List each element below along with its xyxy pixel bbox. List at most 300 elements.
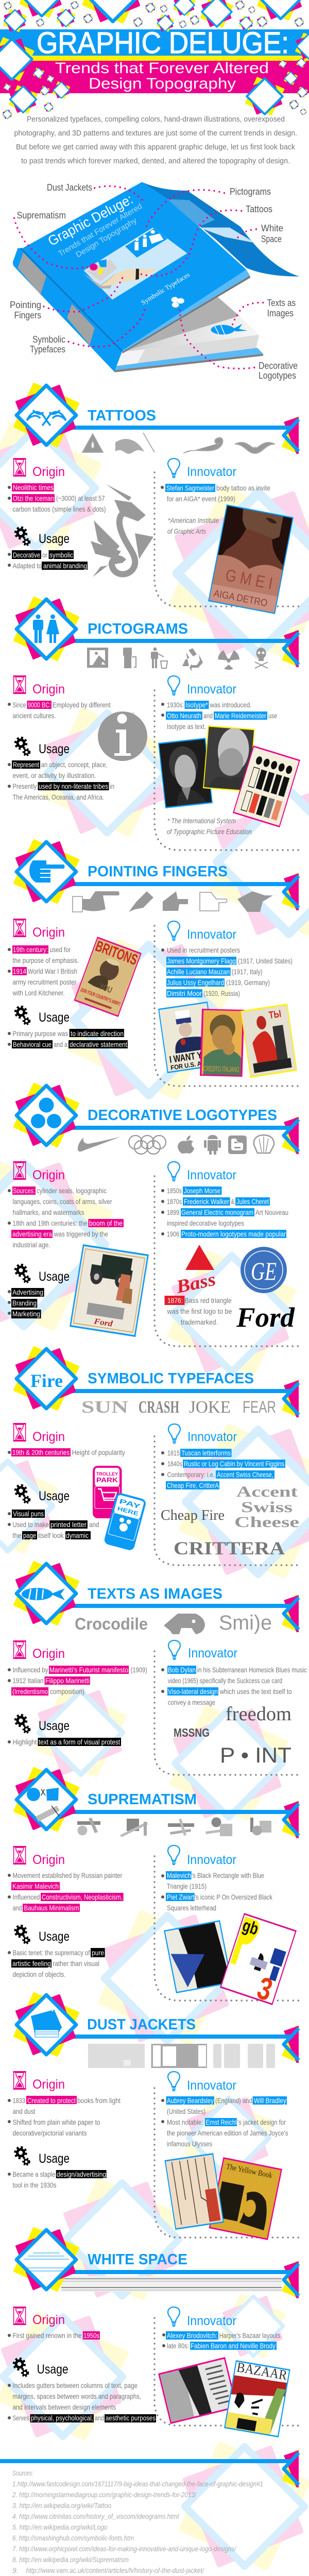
sources list: 1.http://www.fastcodesign.com/1671117/9-big-ideas-that-changed-the-face-of-graphic-design#1 xyxy=(12,2480,263,2488)
origin bullets: Influenced xyxy=(12,1893,40,1901)
subtitle line 2: Design Topography xyxy=(89,75,236,92)
icon: light bulb xyxy=(168,1162,180,1181)
logo: General Electric xyxy=(241,1247,287,1293)
innovator text: Harper's Bazaar layouts xyxy=(219,2331,281,2340)
heading: TATTOOS xyxy=(88,408,156,424)
origin bullets xyxy=(8,945,79,997)
usage bullets: Adapted to xyxy=(12,562,42,570)
cover subtitle 1: Trends that Forever Altered xyxy=(57,202,144,258)
origin bullets xyxy=(8,1448,125,1456)
innovator text: Viso-lateral design xyxy=(168,1687,218,1696)
illustration: trolley park sign: PARK xyxy=(96,1476,118,1484)
footer bar with arrow xyxy=(0,2450,299,2487)
innovator text: (1920, Russia) xyxy=(203,989,240,997)
sources list: Sources: xyxy=(12,2469,33,2477)
origin bullets: hallmarks, and watermarks xyxy=(12,1208,84,1216)
heading: SYMBOLIC TYPEFACES xyxy=(88,1370,254,1387)
label: White xyxy=(261,223,283,233)
label xyxy=(267,297,296,318)
poster: Britons: YOU xyxy=(97,982,113,995)
origin bullets: 1912 Italian xyxy=(12,1676,43,1685)
section: decorative logotypes xyxy=(8,1084,300,1346)
usage bullets xyxy=(8,2170,107,2189)
artwork: Piet Zwart: 3 xyxy=(253,1970,277,2008)
usage bullets: declarative statement xyxy=(70,1040,127,1048)
origin bullets: (1909) xyxy=(131,1666,147,1674)
usage bullets: text as a form of visual protest xyxy=(39,1738,120,1746)
innovator text: (1919, Germany) xyxy=(226,978,270,987)
sample: smile: Smi)e xyxy=(219,1612,272,1634)
usage bullets xyxy=(8,1510,99,1539)
heading: origin: Origin xyxy=(32,1647,65,1661)
origin bullets xyxy=(8,483,106,513)
innovator text: 's iconic P On Oversized Black xyxy=(195,1893,273,1901)
innovator text xyxy=(161,1666,307,1706)
illustration: pay here sign: HERE xyxy=(116,1505,139,1517)
icon: light bulb xyxy=(168,2072,180,2091)
heading: usage: Usage xyxy=(39,1719,70,1733)
section: pointing fingers xyxy=(8,840,300,1086)
poster: Russian: ТЫ xyxy=(268,1008,282,1021)
origin bullets: Movement established by Russian painter xyxy=(12,1871,123,1879)
sample: POINT: P • INT xyxy=(220,1743,291,1767)
icon: hourglass xyxy=(13,919,26,937)
icon: man and woman xyxy=(33,614,59,643)
innovator text: Joseph Morse xyxy=(184,1187,220,1195)
ad: Ford xyxy=(70,1244,149,1337)
cover subtitle 2: Design Topography xyxy=(74,216,139,259)
innovator text: Proto-modern logotypes made popular xyxy=(181,1230,286,1238)
label xyxy=(10,299,41,320)
label: Symbolic xyxy=(32,334,65,345)
intro paragraph: Personalized typefaces, compelling colors, hand-drawn illustrations, overexposed xyxy=(27,115,285,124)
icon: fish xyxy=(22,1588,65,1600)
origin bullets: advertising era xyxy=(12,1230,52,1238)
innovator text: convey a message xyxy=(168,1698,215,1706)
sample: crocodile: Crocodile xyxy=(75,1615,148,1633)
section: suprematism xyxy=(8,1768,300,2010)
poster: Credito Italiano: CREDITO ITALIANO xyxy=(203,1064,239,1074)
innovator text: Julius Ussy Engelhard xyxy=(167,978,224,987)
poster: Credito Italiano xyxy=(200,1009,244,1077)
sample: Accent Swiss Cheese xyxy=(234,1483,299,1531)
magazine cover: Bazaar xyxy=(224,2359,290,2437)
innovator text xyxy=(161,701,277,731)
icon row: jacket spreads xyxy=(88,2044,275,2068)
innovator text: Bob Dylan xyxy=(168,1666,196,1674)
heading: innovator: Innovator xyxy=(187,1853,236,1867)
innovator text: 1870s xyxy=(167,1197,182,1206)
artwork: Malevich xyxy=(164,1920,232,1993)
label: Tattoos xyxy=(246,204,272,214)
innovator text: Piet Zwart xyxy=(167,1893,194,1901)
gray stripes xyxy=(61,2276,282,2292)
usage bullets: Marketing xyxy=(12,1310,40,1318)
book cover: The Yellow Book xyxy=(209,2157,282,2240)
illustration: trolley park sign xyxy=(93,1466,122,1518)
innovator text: Dimitri Moor xyxy=(167,989,202,997)
icon: book xyxy=(31,2009,62,2038)
usage bullets: dynamic xyxy=(66,1531,89,1539)
photo: body tattoo: AIGA DETRO xyxy=(213,588,268,609)
label: Space xyxy=(261,233,282,244)
poster: Uncle Sam: FOR U.S. ARMY xyxy=(170,1058,215,1072)
usage bullets: design/advertising xyxy=(57,2170,106,2178)
heading: WHITE SPACE xyxy=(88,2251,187,2268)
origin bullets: Height of popularity xyxy=(72,1448,125,1456)
origin bullets: 9000 BC: xyxy=(28,701,51,709)
sample: Cheap Fire: Cheap Fire xyxy=(161,1507,225,1523)
usage bullets: Basic tenet: the supremacy of xyxy=(12,1948,90,1957)
innovator text xyxy=(161,1187,288,1238)
innovator text: for an AIGA* event (1999) xyxy=(167,495,235,503)
heading: origin: Origin xyxy=(32,1430,65,1444)
innovator text xyxy=(161,1871,273,1912)
usage bullets: the xyxy=(12,1531,21,1539)
magazine cover: Bazaar: BAZAAR xyxy=(235,2360,289,2383)
usage bullets: Serves xyxy=(12,2414,29,2422)
sample: FEAR: FEAR xyxy=(243,1398,276,1416)
section: texts as images xyxy=(8,1562,307,1775)
icon: light bulb xyxy=(168,2307,180,2326)
origin bullets: was triggered by the xyxy=(54,1230,108,1238)
innovator text: which uses the text itself to xyxy=(219,1687,292,1696)
heading: usage: Usage xyxy=(39,742,70,756)
origin bullets: Neolithic times xyxy=(13,483,54,492)
innovator text: use xyxy=(268,711,277,720)
magazine spread xyxy=(158,2357,237,2424)
origin bullets: composition) xyxy=(50,1687,84,1696)
icon: suprematist shapes xyxy=(27,1788,60,1822)
intro paragraph: But before we get carried away with this apparent graphic deluge, let us first look back xyxy=(16,143,295,151)
innovator text: Accent Swiss Cheese, xyxy=(217,1470,273,1479)
cover author: Symbolic Typefaces xyxy=(140,270,191,307)
label: Pointing xyxy=(10,299,41,310)
sources list: 3. http://en.wikipedia.org/wiki/Tattoo xyxy=(12,2501,111,2510)
innovator text: General Electric monogram xyxy=(181,1208,253,1216)
label xyxy=(259,360,298,381)
sources list xyxy=(12,2469,263,2576)
innovator text: James Montgomery Flagg xyxy=(167,957,236,965)
section: pictograms xyxy=(8,598,300,850)
icon: white space lines xyxy=(24,2253,69,2271)
heading: usage: Usage xyxy=(37,2362,68,2377)
innovator text: Cheap Fire, CritterA xyxy=(167,1481,219,1489)
icon: light bulb xyxy=(168,459,180,478)
innovator text: Squares letterhead xyxy=(167,1904,216,1912)
origin bullets: carbon tattoos (simple lines & dots) xyxy=(12,505,106,513)
icon: three circles xyxy=(31,1097,61,1128)
origin bullets: 1914 xyxy=(13,967,26,975)
usage bullets: Includes gutters between columns of text, page xyxy=(12,2381,138,2389)
usage bullets: symbolic xyxy=(49,551,73,559)
innovator text: Ernst Reichl xyxy=(206,2118,237,2126)
usage bullets: depiction of objects. xyxy=(12,1970,66,1978)
icon: hourglass xyxy=(13,1640,26,1659)
innovator text: 1815 xyxy=(167,1449,180,1457)
origin bullets: with Lord Kitchener. xyxy=(12,989,65,997)
intro paragraph: photography, and 3D patterns and textures are just some of the current trends in design. xyxy=(14,129,297,138)
icon: hourglass xyxy=(13,2071,26,2090)
artwork: Piet Zwart xyxy=(218,1913,297,2010)
photo: body tattoo: G M E I xyxy=(224,566,274,593)
sample: Crittera: CRITTERA xyxy=(174,1538,285,1558)
usage bullets: in xyxy=(110,782,114,790)
innovator text xyxy=(162,2331,281,2350)
heading: origin: Origin xyxy=(32,465,65,479)
origin bullets: and dust xyxy=(12,2107,36,2115)
origin bullets: 1950s xyxy=(83,2331,99,2340)
usage bullets: and xyxy=(89,1520,99,1529)
usage bullets: Became a staple xyxy=(12,2170,55,2178)
innovator text: and xyxy=(203,711,213,720)
origin bullets: World War I British xyxy=(28,967,77,975)
origin bullets: decorative/pictorial variants xyxy=(12,2129,87,2137)
label xyxy=(261,223,283,244)
icon: fire lettering: Fire xyxy=(30,1370,63,1391)
usage bullets: and xyxy=(95,2414,104,2422)
heading: origin: Origin xyxy=(32,2077,65,2092)
heading: innovator: Innovator xyxy=(187,1430,237,1444)
innovator text: (1917, Italy) xyxy=(232,968,263,976)
innovator text xyxy=(161,1449,285,1489)
origin bullets: First gained renown in the xyxy=(12,2331,82,2340)
section: white space xyxy=(8,2228,300,2437)
innovator text: Frederick Walker xyxy=(184,1197,229,1206)
heading: DUST JACKETS xyxy=(87,2016,196,2033)
heading: SUPREMATISM xyxy=(88,1791,197,1808)
innovator text: Stefan Sagmeister xyxy=(166,484,214,492)
heading: origin: Origin xyxy=(32,1168,65,1182)
heading: POINTING FINGERS xyxy=(88,863,228,880)
footnote: *American Institute xyxy=(168,516,219,524)
heading: PICTOGRAMS xyxy=(88,621,188,637)
usage bullets: or xyxy=(42,551,47,559)
icon: dragon tattoo xyxy=(91,484,153,577)
icon: gears xyxy=(15,1485,30,1503)
cover title: Graphic Deluge: xyxy=(45,191,135,249)
icon: gears xyxy=(15,1715,30,1733)
footnote: * The International System xyxy=(167,817,236,825)
icon: gears xyxy=(15,528,30,545)
origin bullets: languages, coins, coats of arms, silver xyxy=(12,1197,112,1206)
innovator text: Otto Neurath xyxy=(167,711,201,720)
innovator text: 's jacket design for xyxy=(237,2118,286,2126)
innovator text: late 80s: xyxy=(167,2342,189,2350)
innovator text: Isotype* xyxy=(185,701,208,709)
usage bullets xyxy=(8,550,88,570)
logo: Bass: Bass xyxy=(174,1269,217,1297)
usage bullets xyxy=(8,1948,105,1978)
origin bullets: Employed by different xyxy=(53,701,111,709)
intro paragraph xyxy=(14,115,297,165)
innovator text: Art Nouveau xyxy=(255,1208,288,1216)
heading: usage: Usage xyxy=(39,2151,70,2166)
footnote xyxy=(167,817,252,836)
heading: origin: Origin xyxy=(32,682,65,697)
origin bullets: and xyxy=(12,1904,22,1912)
origin bullets: Created to protect xyxy=(27,2096,76,2105)
photo: Otto Neurath xyxy=(203,725,255,792)
sample: CRASH: CRASH xyxy=(139,1398,179,1417)
icon: hourglass xyxy=(13,675,26,694)
innovator text: Triangle (1915) xyxy=(167,1882,207,1890)
illustration: pay here sign xyxy=(104,1492,147,1551)
usage bullets: printed letter xyxy=(50,1520,87,1529)
usage bullets: used by non-literate tribes xyxy=(39,782,108,790)
origin bullets xyxy=(8,1187,124,1249)
note: Bass: Bass red triangle xyxy=(185,1296,232,1304)
innovator text: 1850s xyxy=(167,1187,182,1195)
innovator text: was introduced. xyxy=(210,701,251,709)
subtitle line 1: Trends that Forever Altered xyxy=(55,60,269,77)
innovator text: Used in recruitment posters xyxy=(167,946,240,954)
icon: hourglass xyxy=(13,1846,26,1865)
icon row: suprematist compositions xyxy=(77,1818,271,1837)
usage bullets: rather than visual xyxy=(53,1959,99,1968)
innovator text: Tuscan letterforms xyxy=(181,1449,231,1457)
usage bullets: page xyxy=(23,1531,36,1539)
heading: usage: Usage xyxy=(39,1010,70,1025)
innovator text: inspired decorative logotypes xyxy=(167,1219,244,1227)
icon: hourglass xyxy=(13,1423,26,1442)
icon: tribal tattoo xyxy=(27,410,66,426)
logo: Ford: Ford xyxy=(236,1302,295,1333)
sample: JOKE: JOKE xyxy=(189,1398,231,1417)
origin bullets xyxy=(8,2096,121,2137)
origin bullets: books from light xyxy=(77,2096,121,2105)
usage bullets: animal branding xyxy=(43,562,87,570)
usage bullets: Advertising xyxy=(12,1288,43,1296)
sources list: 2. http://morningstarmediagroup.com/graphic-design-trends-for-2013/ xyxy=(12,2490,197,2499)
label: Images xyxy=(267,308,294,318)
poster: Britons: JOIN YOUR COUNTRY'S ARMY! xyxy=(79,987,122,1007)
icon: gears xyxy=(15,1926,29,1943)
poster: Uncle Sam xyxy=(158,1002,217,1073)
icon row: logos xyxy=(78,1135,274,1155)
label: Pictograms xyxy=(230,186,271,197)
sample: MSSNG: MSSNG xyxy=(174,1726,210,1739)
usage bullets: to indicate direction xyxy=(71,1029,124,1038)
origin bullets: the purpose of emphasis. xyxy=(12,956,79,964)
innovator text: Isotype as text. xyxy=(167,722,206,731)
logo: Bass xyxy=(174,1245,217,1297)
innovator text: 1840s xyxy=(167,1460,182,1468)
label: Texts as xyxy=(267,297,296,308)
origin bullets: 19th & 20th centuries xyxy=(12,1448,70,1456)
note: Bass: trademarked. xyxy=(181,1318,218,1326)
innovator text: Achille Luciano Mauzan xyxy=(167,968,230,976)
section: symbolic typefaces xyxy=(8,1347,300,1565)
sources list: 7. http://www.orphicpixel.com/ideas-for-making-innovative-and-unique-logo-designs/ xyxy=(12,2545,237,2553)
section: tattoos xyxy=(8,384,300,614)
heading: usage: Usage xyxy=(39,532,70,546)
heading: origin: Origin xyxy=(32,925,65,940)
origin bullets: 19th century: xyxy=(13,945,48,954)
origin bullets: Influenced by xyxy=(12,1666,48,1674)
icon: hourglass xyxy=(13,2307,26,2325)
icon: hourglass xyxy=(13,1161,26,1180)
heading: innovator: Innovator xyxy=(187,2314,236,2328)
sample: Accent Swiss Cheese: Accent xyxy=(236,1483,298,1500)
heading: usage: Usage xyxy=(39,1929,70,1944)
icon: gears xyxy=(15,1265,30,1282)
usage bullets: The Americas, Oceania, and Africa. xyxy=(12,793,104,801)
icon row: pictograms xyxy=(87,647,268,671)
innovator text: (1917, United States) xyxy=(238,957,293,965)
sample: SUN: SUN xyxy=(81,1398,129,1417)
icon row: pointing hands xyxy=(73,891,273,912)
innovator text: Aubrey Beardsley xyxy=(167,2096,214,2105)
heading: innovator: Innovator xyxy=(187,682,236,697)
innovator text: infamous Ulysses xyxy=(167,2140,212,2148)
usage bullets: Primary purpose was xyxy=(12,1029,68,1038)
usage bullets: Highlight xyxy=(12,1738,37,1746)
book cover: Ulysses xyxy=(165,2153,224,2230)
usage bullets: event, or activity by illustration. xyxy=(12,771,96,779)
origin bullets: Since xyxy=(12,701,26,709)
innovator text: Alexey Brodovitch: xyxy=(167,2331,217,2340)
innovator text: Will Bradley xyxy=(254,2096,286,2105)
footnote xyxy=(167,516,219,535)
usage bullets: Presently xyxy=(12,782,37,790)
icon: light bulb xyxy=(168,1424,180,1443)
heading: innovator: Innovator xyxy=(187,1168,236,1182)
heading: TEXTS AS IMAGES xyxy=(88,1586,222,1602)
sources list: 6. http://smashinghub.com/symbolic-fonts.htm xyxy=(12,2534,134,2542)
usage bullets: Represent xyxy=(13,760,39,769)
usage bullets: physical, psychological, xyxy=(31,2414,93,2422)
innovator text: (England) and xyxy=(215,2096,252,2105)
illustration: trolley park sign: TROLLEY xyxy=(96,1471,118,1477)
usage bullets: Used to make xyxy=(12,1520,49,1529)
icon: info circle xyxy=(98,711,147,761)
usage bullets xyxy=(8,1288,44,1318)
label: Typefaces xyxy=(30,344,65,354)
innovator text: & xyxy=(231,1197,235,1206)
usage bullets: itself look xyxy=(38,1531,64,1539)
usage bullets xyxy=(8,2381,156,2422)
origin bullets: army recruitment poster xyxy=(12,978,77,986)
note: Bass: was the first logo to be xyxy=(167,1307,232,1315)
icon: gears xyxy=(14,2359,28,2376)
icon: light bulb xyxy=(168,1640,180,1659)
icon: hourglass xyxy=(13,458,26,477)
usage bullets: tool in the 1930s xyxy=(12,2181,57,2189)
origin bullets: Otzi the Iceman xyxy=(13,494,54,502)
footnote: of Typographic Picture Education xyxy=(167,827,252,836)
origin bullets: Bauhaus Minimalism xyxy=(24,1904,79,1912)
origin bullets: (~3000) at least 57 xyxy=(56,494,105,502)
innovator text: 1899 xyxy=(167,1208,179,1216)
poster: Britons xyxy=(74,937,142,1017)
icon row: tattoos xyxy=(82,433,275,453)
heading: innovator: Innovator xyxy=(187,2078,236,2093)
icon: light bulb xyxy=(168,921,180,940)
sources list: 4. http://www.citrinitas.com/history_of_viscom/ideograms.html xyxy=(12,2512,179,2520)
note: Bass: 1876: xyxy=(167,1296,183,1304)
origin bullets xyxy=(8,1871,124,1912)
innovator text: Most notable: xyxy=(167,2118,203,2126)
sample: Accent Swiss Cheese: Cheese xyxy=(234,1514,299,1531)
usage bullets: Behavioral cue xyxy=(13,1040,52,1048)
innovator text: (United States) xyxy=(167,2107,205,2115)
photo: Marie Reidemeister xyxy=(158,738,213,808)
sources list: 9. xyxy=(12,2566,19,2574)
innovator text xyxy=(161,2096,288,2148)
header banner xyxy=(0,0,309,119)
footnote: of Graphic Arts xyxy=(167,527,206,535)
